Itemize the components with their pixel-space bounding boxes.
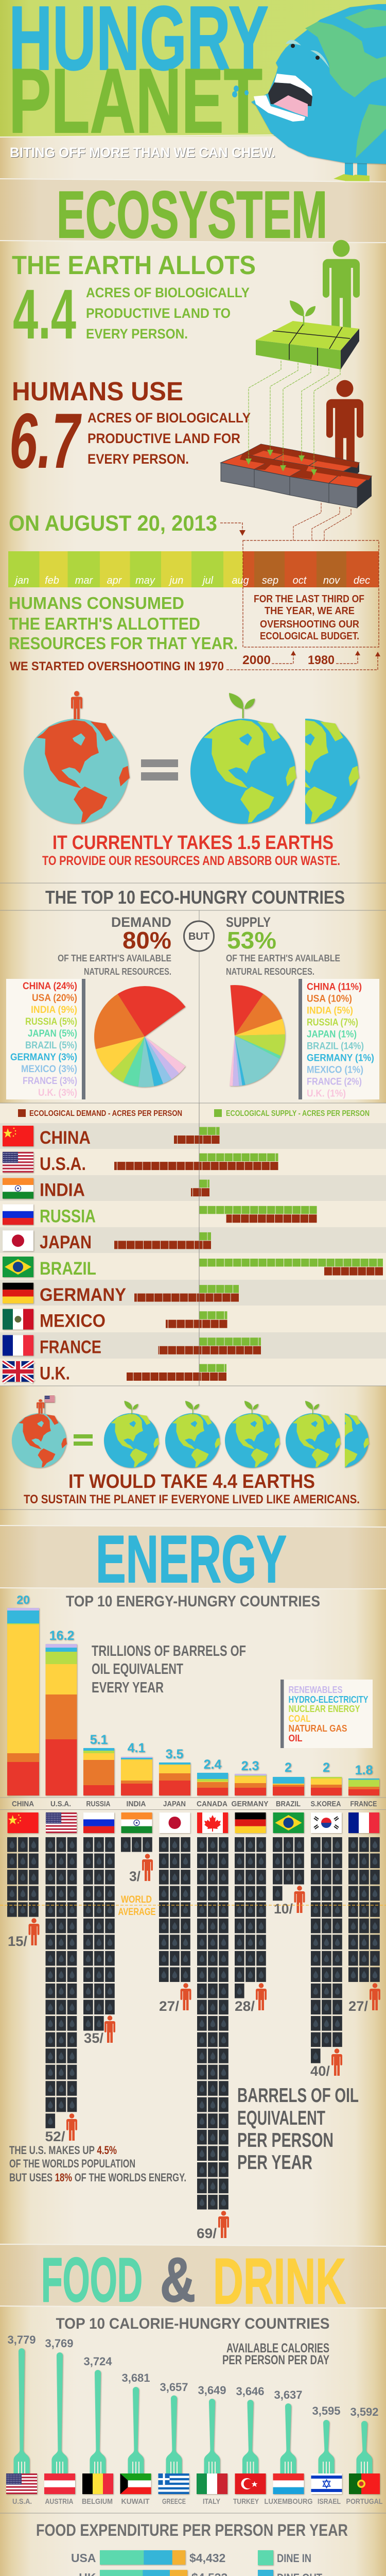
- text block: earth allots: [12, 250, 256, 354]
- text: barrels of oil equivalent: EQUIVALENT: [237, 2107, 325, 2129]
- subtitle: BITING OFF MORE THAN WE CAN CHEW.: [10, 145, 275, 160]
- text block: humans use: ACRES OF BIOLOGICALLY: [87, 410, 251, 426]
- icon: equals sign: [141, 759, 178, 781]
- legend: food expenditure: [258, 2550, 375, 2576]
- calorie values: 3,769: [45, 2337, 74, 2350]
- title: Planet: PLANET: [9, 49, 262, 152]
- chart: year timeline: feb: [45, 575, 59, 586]
- legend: demand by country: MEXICO (3%): [21, 1064, 77, 1075]
- icon: red overused land boxes: [221, 444, 372, 508]
- barrels: South Korea 40: [310, 1837, 342, 2079]
- legend: energy sources: COAL: [288, 1714, 311, 1724]
- text block: supply: 53%: [227, 927, 276, 954]
- bar: France 1.8: [348, 1763, 379, 1795]
- legend: demand by country: U.K. (3%): [38, 1088, 77, 1098]
- country labels: calories: U.S.A.: [12, 2497, 32, 2506]
- text block: demand: NATURAL RESOURCES.: [84, 967, 171, 977]
- world average marker: WORLD: [121, 1894, 152, 1905]
- text block: earth allots: THE EARTH ALLOTS: [12, 250, 256, 280]
- text block: earth allots: ACRES OF BIOLOGICALLY: [86, 285, 250, 300]
- fork: Greece: [166, 2396, 182, 2473]
- heading: top 10 calorie-hungry countries: TOP 10 CALORIE-HUNGRY COUNTRIES: [56, 2315, 329, 2332]
- row: France: FRANCE: [40, 1337, 101, 1357]
- chart: year timeline: aug: [232, 575, 249, 586]
- country labels: energy: U.S.A.: [50, 1800, 71, 1808]
- text block: supply: NATURAL RESOURCES.: [226, 967, 314, 977]
- row: Russia: RUSSIA: [40, 1206, 96, 1226]
- row: USA $4,432: $4,432: [189, 2551, 225, 2565]
- text block: humans consumed: HUMANS CONSUMED: [9, 594, 184, 613]
- chart: energy stacked bars: [7, 1593, 379, 1795]
- legend: supply by country: FRANCE (2%): [307, 1077, 362, 1087]
- barrels: Brazil 10: [273, 1837, 305, 1917]
- bar: Brazil 2: [273, 1760, 304, 1795]
- row: Japan: JAPAN: [40, 1232, 92, 1252]
- country labels: energy: RUSSIA: [86, 1800, 111, 1808]
- legend: supply by country: JAPAN (1%): [307, 1029, 357, 1040]
- text: barrels of oil equivalent: PER PERSON: [237, 2129, 334, 2151]
- icon: person on red earth: [24, 691, 130, 824]
- barrels: India 3: 3/: [129, 1869, 141, 1884]
- chart: barrels per person: [7, 1837, 380, 2241]
- bar: South Korea 2: [311, 1760, 342, 1795]
- callout: overshoot box: THE YEAR, WE ARE: [265, 605, 355, 617]
- row: Japan: [3, 1230, 211, 1252]
- text: US share of energy: BUT USES 18% OF THE WORLDS ENERGY.: [9, 2171, 186, 2184]
- legend: demand by country: RUSSIA (5%): [25, 1016, 77, 1027]
- legend: demand by country: [6, 979, 85, 1099]
- legend: supply by country: U.K. (1%): [307, 1088, 346, 1099]
- arrows: green dashed land lines: [245, 361, 340, 476]
- chart: supply pie: [230, 985, 285, 1086]
- panel: 1.5 earths: [24, 691, 359, 868]
- flags row: calories: [6, 2473, 380, 2494]
- bar: India 4.1: 4.1: [128, 1741, 145, 1755]
- row: USA: [3, 1152, 278, 1174]
- text block: demand: OF THE EARTH'S AVAILABLE: [58, 953, 171, 963]
- timeline of overshoot years: 2000: [242, 653, 271, 667]
- fork: Luxembourg: [280, 2403, 296, 2473]
- heading: top 10 eco-hungry countries: THE TOP 10 ECO-HUNGRY COUNTRIES: [45, 887, 345, 908]
- icon: earth with sprout: [190, 693, 296, 824]
- country labels: energy: CANADA: [197, 1800, 227, 1808]
- fork: Italy: [204, 2399, 220, 2473]
- text: trillions of barrels: EVERY YEAR: [92, 1680, 164, 1696]
- text: trillions of barrels: OIL EQUIVALENT: [92, 1661, 183, 1677]
- text: US share of energy: OF THE WORLDS POPULATION: [9, 2157, 135, 2170]
- chart: calorie forks: [13, 2348, 373, 2473]
- legend: food expenditure: DINE IN: [277, 2552, 311, 2565]
- heading: would take 4.4 earths: IT WOULD TAKE 4.4 EARTHS: [68, 1471, 315, 1493]
- calorie values: 3,637: [274, 2388, 303, 2401]
- text block: humans use: 6.7: [9, 397, 82, 485]
- world average marker: [0, 1894, 386, 1918]
- timeline of overshoot years: WE STARTED OVERSHOOTING IN 1970: [10, 659, 224, 673]
- legend: supply by country: USA (10%): [307, 993, 352, 1005]
- row: Brazil: [3, 1257, 383, 1279]
- arrows: red dashed overshoot lines: [293, 503, 351, 540]
- chart: year timeline: sep: [262, 575, 278, 586]
- text block: humans consumed: THE EARTH'S ALLOTTED: [9, 614, 200, 633]
- legend: demand by country: FRANCE (3%): [23, 1076, 77, 1087]
- bar: Russia 5.1: [83, 1733, 114, 1795]
- chart: year timeline: apr: [107, 575, 122, 586]
- text: barrels of oil equivalent: [237, 2084, 359, 2174]
- text: available calories: [222, 2341, 329, 2367]
- barrels: Japan 27: 27/: [159, 1998, 180, 2014]
- chart: year timeline: may: [135, 575, 155, 586]
- country labels: calories: GREECE: [162, 2497, 186, 2506]
- barrels: Canada 69: 69/: [197, 2226, 217, 2241]
- legend: energy sources: RENEWABLES: [288, 1685, 343, 1695]
- row: Brazil: BRAZIL: [40, 1259, 96, 1279]
- chart: year timeline: jun: [168, 575, 183, 586]
- text block: earth allots: EVERY PERSON.: [86, 326, 188, 342]
- text block: demand: [58, 914, 171, 977]
- barrels: China 15: [7, 1837, 39, 1949]
- legend: supply by country: GERMANY (1%): [307, 1053, 374, 1063]
- legend: supply by country: CHINA (11%): [307, 982, 362, 992]
- country labels: energy: GERMANY: [232, 1800, 269, 1808]
- panel: header: [0, 0, 386, 183]
- row: China: [3, 1126, 220, 1148]
- chart: year timeline: jul: [201, 575, 214, 586]
- chart: year timeline: mar: [75, 575, 94, 586]
- legend: energy sources: NUCLEAR ENERGY: [288, 1704, 360, 1714]
- bar: India 4.1: [121, 1741, 152, 1795]
- icons: four earths and a half: [104, 1401, 369, 1468]
- bar: USA 16.2: 16.2: [49, 1629, 74, 1643]
- panel: 4.4 earths: [12, 1396, 369, 1506]
- bar: Japan 3.5: [159, 1747, 190, 1795]
- barrels: South Korea 40: 40/: [310, 2063, 330, 2079]
- icon: hungry globe character: [232, 4, 386, 183]
- text: on August 20, 2013: ON AUGUST 20, 2013: [9, 511, 217, 536]
- text block: humans use: EVERY PERSON.: [87, 451, 189, 467]
- country labels: calories: BELGIUM: [82, 2497, 113, 2506]
- country labels: energy: INDIA: [127, 1800, 146, 1808]
- text block: earth allots: 4.4: [13, 275, 76, 354]
- icon: half earth: [305, 718, 360, 825]
- text: trillions of barrels: [92, 1643, 246, 1696]
- fork: Turkey: [242, 2400, 258, 2473]
- text: trillions of barrels: TRILLIONS OF BARRELS OF: [92, 1643, 246, 1659]
- callout: overshoot box: ECOLOGICAL BUDGET.: [260, 631, 359, 642]
- text block: supply: OF THE EARTH'S AVAILABLE: [226, 953, 340, 963]
- section title: Food and Drink: FOOD: [41, 2245, 143, 2315]
- country labels: calories: TURKEY: [233, 2497, 259, 2506]
- bar: Brazil 2: 2: [285, 1760, 292, 1775]
- row: Germany: [3, 1283, 239, 1305]
- fork: Portugal: [356, 2421, 373, 2473]
- legend: supply by country: [299, 979, 379, 1099]
- icon: green land platform: [256, 300, 359, 369]
- row: China: CHINA: [40, 1128, 91, 1148]
- bar: France 1.8: 1.8: [355, 1763, 373, 1777]
- text block: humans use: [9, 377, 251, 485]
- fork: Austria: [51, 2352, 68, 2473]
- icon: American on red earth: [12, 1396, 67, 1468]
- legend: supply by country: BRAZIL (14%): [307, 1041, 364, 1052]
- row: UK: U.K.: [40, 1363, 70, 1384]
- calorie values: 3,681: [121, 2371, 150, 2384]
- heading: takes 1.5 earths: IT CURRENTLY TAKES 1.5 EARTHS: [52, 832, 334, 854]
- legend: energy sources: NATURAL GAS: [288, 1723, 347, 1734]
- calorie values: 3,595: [312, 2404, 341, 2417]
- bar: Russia 5.1: 5.1: [90, 1733, 108, 1747]
- arrow: date to timeline: [220, 523, 245, 536]
- callout: overshoot box: [243, 540, 379, 647]
- bar: South Korea 2: 2: [323, 1760, 330, 1775]
- barrels: France 27: [348, 1837, 380, 2014]
- barrels: Russia 35: [83, 1837, 115, 2046]
- chart: year timeline: jan: [14, 575, 29, 586]
- row: Germany: GERMANY: [40, 1285, 126, 1305]
- row: France: [3, 1335, 261, 1357]
- legend: demand by country: INDIA (9%): [31, 1005, 77, 1015]
- country labels: energy: [12, 1800, 377, 1808]
- fork: USA: [13, 2348, 30, 2473]
- bar: Germany 2.3: [235, 1759, 266, 1795]
- text block: humans use: PRODUCTIVE LAND FOR: [87, 431, 240, 446]
- barrels: Japan 27: [159, 1837, 191, 2014]
- timeline of overshoot years: [10, 651, 380, 673]
- country labels: calories: KUWAIT: [121, 2497, 149, 2506]
- bar: Canada 2.4: [197, 1757, 228, 1795]
- country labels: energy: S.KOREA: [311, 1800, 341, 1808]
- country labels: calories: ITALY: [203, 2497, 220, 2506]
- barrels: Brazil 10: 10/: [274, 1901, 293, 1917]
- row: USA: U.S.A.: [40, 1154, 86, 1174]
- flags row: energy: [7, 1812, 379, 1833]
- calorie values: 3,592: [350, 2405, 379, 2418]
- text block: supply: SUPPLY: [226, 914, 271, 930]
- country labels: calories: [12, 2497, 383, 2506]
- text: US share of energy: [9, 2144, 186, 2184]
- legend: demand by country: BRAZIL (5%): [25, 1040, 77, 1051]
- legend: demand by country: GERMANY (3%): [10, 1052, 77, 1063]
- barrels: Germany 28: 28/: [235, 1998, 255, 2014]
- text: available calories: PER PERSON PER DAY: [222, 2353, 329, 2367]
- legend: energy sources: OIL: [288, 1733, 303, 1743]
- callout: overshoot box: OVERSHOOTING OUR: [260, 619, 359, 630]
- heading: top 10 energy-hungry countries: TOP 10 ENERGY-HUNGRY COUNTRIES: [66, 1593, 320, 1610]
- text: available calories: AVAILABLE CALORIES: [226, 2341, 329, 2355]
- chart: demand pie: [94, 986, 185, 1087]
- chart: year timeline: oct: [293, 575, 307, 586]
- section title: Food and Drink: &: [160, 2245, 196, 2315]
- barrels: France 27: 27/: [348, 1998, 368, 2014]
- chart: year timeline: dec: [354, 575, 370, 586]
- calorie values: 3,649: [198, 2384, 226, 2397]
- barrels: USA 52: [45, 1837, 77, 2144]
- legend: supply by country: MEXICO (1%): [307, 1064, 363, 1076]
- country labels: calories: ISRAEL: [318, 2497, 341, 2506]
- text: barrels of oil equivalent: PER YEAR: [237, 2151, 312, 2174]
- text: US share of energy: THE U.S. MAKES UP 4.5%: [9, 2144, 117, 2157]
- country labels: calories: AUSTRIA: [45, 2497, 74, 2506]
- bar: China 20: [7, 1593, 39, 1795]
- bar: Japan 3.5: 3.5: [166, 1747, 183, 1761]
- country labels: calories: LUXEMBOURG: [265, 2497, 313, 2506]
- row: USA $4,432: USA: [71, 2551, 96, 2565]
- legend: demand by country: JAPAN (5%): [28, 1028, 77, 1039]
- barrels: China 15: 15/: [8, 1934, 27, 1949]
- chart: year timeline: nov: [323, 575, 340, 586]
- icon: red person: [326, 380, 363, 473]
- section title: Energy: ENERGY: [96, 1521, 287, 1597]
- legend: supply by country: INDIA (5%): [307, 1006, 353, 1016]
- icon: equals sign: [74, 1434, 93, 1446]
- row: India: INDIA: [40, 1180, 85, 1200]
- text block: humans use: HUMANS USE: [12, 377, 183, 406]
- badge: but: [184, 921, 214, 951]
- timeline of overshoot years: 1980: [308, 653, 335, 667]
- text block: humans consumed: RESOURCES FOR THAT YEAR.: [9, 634, 238, 653]
- legend: demand by country: USA (20%): [32, 993, 77, 1004]
- fork: Belgium: [90, 2370, 106, 2473]
- text block: demand: DEMAND: [111, 914, 171, 930]
- row: UK $4,533: [79, 2570, 227, 2576]
- bar: China 20: 20: [16, 1593, 30, 1606]
- chart: ecological demand vs supply table: [0, 1103, 386, 1386]
- barrels: USA 52: 52/: [45, 2129, 65, 2144]
- fork: Kuwait: [128, 2387, 144, 2473]
- barrels: Russia 35: 35/: [84, 2030, 103, 2046]
- world average marker: AVERAGE: [118, 1907, 155, 1918]
- icon: green person: [323, 240, 360, 333]
- calorie values: 3,724: [83, 2355, 112, 2368]
- badge: but: BUT: [188, 931, 209, 942]
- fork: Israel: [318, 2420, 335, 2473]
- barrels: India 3: [121, 1837, 153, 1884]
- calorie values: [7, 2333, 379, 2418]
- bar: Germany 2.3: 2.3: [241, 1759, 259, 1773]
- row: India: [3, 1178, 209, 1200]
- legend: supply by country: RUSSIA (7%): [307, 1017, 358, 1028]
- text block: supply: [226, 914, 340, 977]
- row: UK: [3, 1361, 226, 1384]
- bar: Canada 2.4: 2.4: [204, 1757, 221, 1772]
- calorie values: 3,657: [160, 2381, 188, 2394]
- country labels: energy: FRANCE: [350, 1800, 377, 1808]
- legend: energy sources: HYDRO-ELECTRICITY: [288, 1694, 369, 1705]
- callout: overshoot box: FOR THE LAST THIRD OF: [254, 594, 364, 605]
- barrels: Germany 28: [235, 1837, 267, 2014]
- chart: year timeline: [8, 551, 379, 587]
- bar: USA 16.2: [45, 1629, 77, 1795]
- row: Mexico: MEXICO: [40, 1311, 106, 1331]
- legend: demand by country: CHINA (24%): [23, 981, 77, 992]
- chart: food expenditure stacked bars: [9, 2550, 295, 2576]
- row: Mexico: [3, 1309, 227, 1331]
- country labels: energy: BRAZIL: [276, 1800, 301, 1808]
- calorie values: 3,646: [236, 2385, 265, 2398]
- row: USA $4,432: [71, 2550, 225, 2565]
- calorie values: 3,779: [7, 2333, 36, 2346]
- text block: demand: 80%: [122, 927, 171, 954]
- text block: earth allots: PRODUCTIVE LAND TO: [86, 306, 231, 321]
- country labels: energy: CHINA: [12, 1800, 34, 1808]
- country labels: energy: JAPAN: [163, 1800, 186, 1808]
- legend: demand: ECOLOGICAL DEMAND - ACRES PER PERSON: [29, 1109, 182, 1118]
- row: Russia: [3, 1204, 317, 1226]
- text block: humans consumed: [9, 594, 238, 653]
- legend: energy sources: [280, 1680, 373, 1748]
- barrels: Canada 69: [197, 1837, 229, 2241]
- section title: Food and Drink: [41, 2245, 346, 2317]
